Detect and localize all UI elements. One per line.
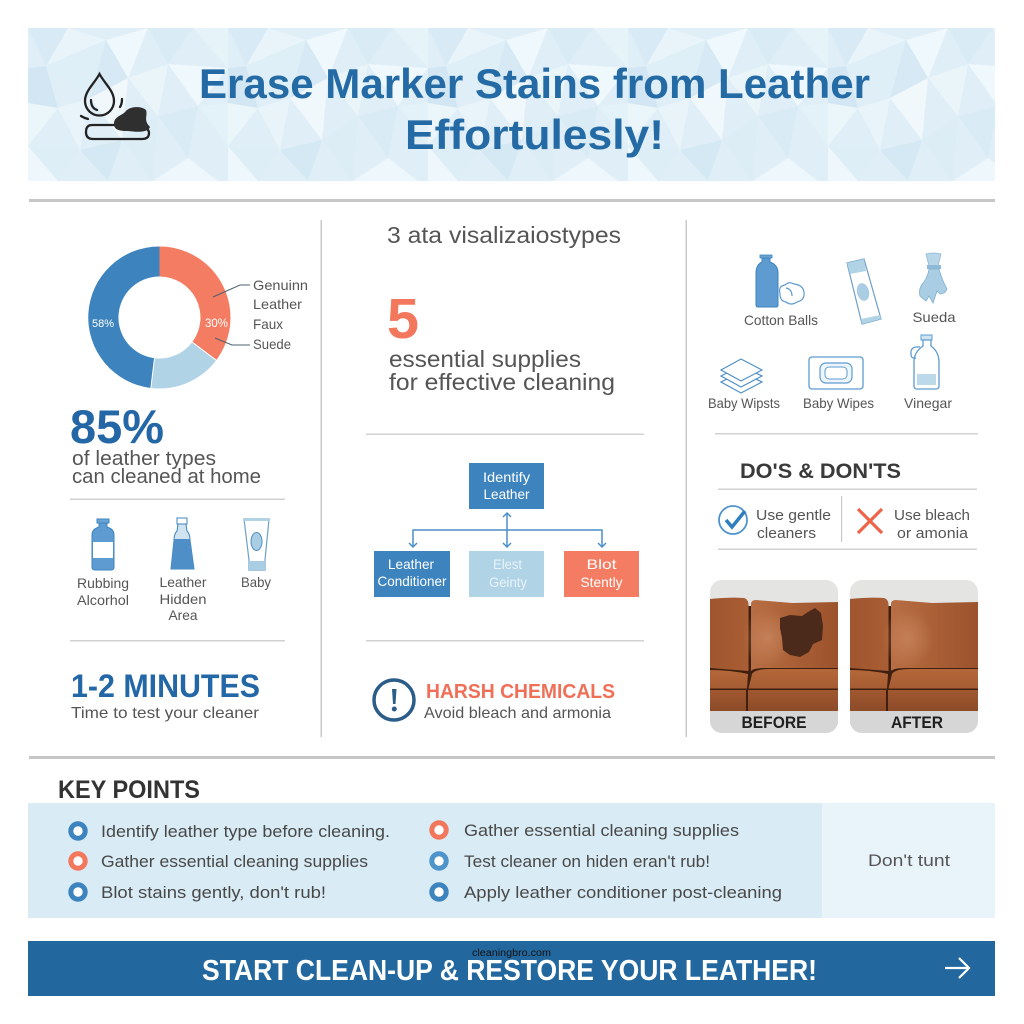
photo: before [710,580,838,733]
box: blot gently [469,551,544,597]
stat: 5 supplies [387,287,615,395]
side note: Don't tunt [868,851,950,870]
don't: bleach or ammonia [858,507,970,542]
bullet list: left: Blot stains gently, don't rub! [101,883,326,902]
box: blot gently: Geinty [489,574,527,590]
heading: KEY POINTS [58,776,200,804]
donut chart: Suede [253,336,291,352]
box: leather conditioner: Leather [388,556,434,572]
icon: leather cleaner bottle [160,518,207,623]
stat: 5 supplies: 5 [387,287,419,351]
bullet list: left: Identify leather type before cleaning. [101,822,390,841]
icon: stack of cloths [708,359,780,411]
donut chart: 30% [205,318,228,330]
stat: 85%: can cleaned at home [72,466,261,488]
icon: leather cleaner bottle: Leather [160,574,207,590]
title banner [28,28,995,181]
panel: key points [28,776,995,918]
box: identify leather: Identify [483,469,530,485]
photo: before: BEFORE [742,713,806,732]
photo: after: AFTER [891,713,943,732]
connector arrows [409,513,606,547]
icon: vinegar bottle [904,335,952,411]
photo: after [850,580,978,733]
icon: arrow [945,958,969,978]
flowchart [374,463,639,597]
box: blot gently: Elest [493,556,522,572]
bullet list: right: Test cleaner on hiden eran't rub! [464,852,710,871]
stat: 85% [70,400,261,488]
do: gentle cleaners: cleaners [757,525,816,542]
icon: bottle and cotton balls [744,255,818,328]
do: gentle cleaners [719,506,831,542]
donut chart [88,246,308,389]
box: leather conditioner [374,551,450,597]
bullet list: right: Gather essential cleaning supplies [464,821,739,840]
panel: middle column [366,222,644,722]
heading: Erase Marker Stains from Leather [199,60,870,107]
icon: rubbing alcohol bottle [77,519,129,608]
box: leather conditioner: Conditioner [378,573,447,589]
don't: bleach or ammonia: Use bleach [894,507,970,524]
do: gentle cleaners: Use gentle [756,507,831,524]
watermark: cleaningbro.com [472,948,551,959]
icon: baby wipes pack: Baby Wipes [803,395,874,411]
icon: leather cleaner bottle: Hidden [160,591,206,607]
icon: stack of cloths: Baby Wipsts [708,395,780,411]
icon: baby cream tube [241,518,271,590]
bullet list: right [432,821,782,902]
warning: harsh chemicals: Avoid bleach and armonia [424,705,611,722]
heading: do's and don'ts: DO'S & DON'TS [740,460,901,483]
icon: slanted tube [847,259,881,324]
box: blot stently: Stently [580,574,622,590]
warning: harsh chemicals [374,680,615,722]
panel: left column [70,246,308,722]
icon: baby wipes pack [803,357,874,411]
stat: 5 supplies: for effective cleaning [389,369,615,395]
bullet list: left: Gather essential cleaning supplies [101,852,368,871]
donut chart: Leather [253,296,302,312]
heading [199,60,870,158]
icon: rubbing alcohol bottle: Rubbing [77,575,129,591]
bullet list: left [71,822,390,902]
icon: baby cream tube: Baby [241,574,271,590]
box: blot stently [564,551,639,597]
bullet list: right: Apply leather conditioner post-cleaning [464,883,782,902]
call to action bar [28,941,995,996]
icon: bottle and cotton balls: Cotton Balls [744,312,818,328]
section heading: 3 ata visalizaiostypes [387,222,621,248]
panel: right column [708,253,978,733]
icon: rubbing alcohol bottle: Alcorhol [77,592,129,608]
icon: suede brush [912,253,956,325]
stat: 1-2 minutes: Time to test your cleaner [71,705,260,722]
donut chart: Faux [253,316,283,332]
icon: suede brush: Sueda [912,309,956,325]
stat: 1-2 minutes: 1-2 MINUTES [71,668,260,704]
donut chart: Genuinn [253,277,308,293]
heading: Effortulesly! [405,111,664,158]
warning: harsh chemicals: HARSH CHEMICALS [426,681,615,703]
donut chart: 58% [92,318,114,330]
stat: 5 supplies: essential supplies [389,346,581,372]
icon: water drop and stain [81,74,150,139]
stat: 85%: 85% [70,400,164,453]
box: identify leather: Leather [484,486,530,502]
stat: 85%: of leather types [72,448,216,470]
box: blot stently: Blot [586,556,617,572]
icon: vinegar bottle: Vinegar [904,395,952,411]
box: identify leather [469,463,544,509]
call to action bar: START CLEAN-UP & RESTORE YOUR LEATHER! [202,955,817,987]
stat: 1-2 minutes [71,668,260,722]
don't: bleach or ammonia: or amonia [897,525,969,542]
icon: leather cleaner bottle: Area [168,607,198,623]
